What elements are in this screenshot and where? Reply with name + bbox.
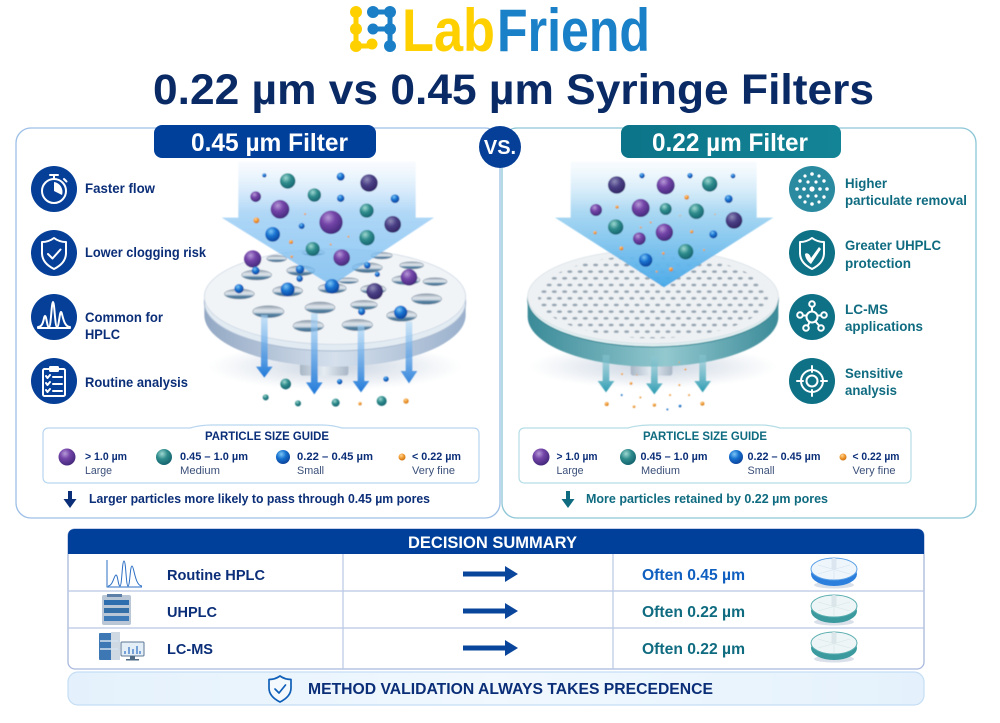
table header [68, 529, 924, 554]
size: medium: 0.45 – 1.0 µm [180, 451, 248, 463]
icon: teal syringe filter [811, 632, 857, 662]
size: large: Large [85, 465, 112, 477]
size: medium [620, 449, 708, 477]
icon: teal syringe filter [811, 595, 857, 626]
footer callout: method validation: METHOD VALIDATION ALWAYS TAKES PRECEDENCE [308, 681, 713, 698]
particle size guide: PARTICLE SIZE GUIDE [205, 431, 329, 443]
icon: UHPLC instrument [102, 594, 131, 625]
benefit: sensitive analysis [789, 358, 903, 404]
size: medium: Medium [641, 465, 680, 477]
title: 0.22 µm vs 0.45 µm Syringe Filters [153, 66, 874, 114]
heading: 0.45 µm Filter [154, 125, 376, 158]
row: UHPLC: UHPLC [167, 605, 218, 621]
illustration: small-pore filter disc with particles [528, 162, 778, 410]
benefit: greater UHPLC protection: Greater UHPLC [845, 237, 941, 253]
heading: 0.22 µm Filter: 0.22 µm Filter [652, 129, 808, 157]
VS badge: VS. [484, 137, 516, 159]
size: small [276, 450, 373, 477]
size: large: > 1.0 µm [556, 451, 598, 463]
benefit: higher particulate removal: particulate removal [845, 192, 967, 208]
icon: LC-MS instrument with monitor [99, 632, 144, 660]
panel: 0.22 µm filter [502, 125, 976, 518]
row: routine HPLC: Often 0.45 µm [642, 567, 745, 584]
size: medium [156, 449, 248, 477]
row: LC-MS: Often 0.22 µm [642, 641, 745, 658]
size: small: 0.22 – 0.45 µm [297, 451, 373, 463]
size: very fine [840, 451, 900, 477]
benefit: routine analysis [31, 358, 188, 404]
benefit: common for HPLC: HPLC [85, 326, 120, 342]
icon: shield check [269, 676, 291, 702]
flow arrows through pores [256, 313, 417, 394]
size: very fine: < 0.22 µm [852, 451, 900, 463]
particle size guide: PARTICLE SIZE GUIDE [643, 431, 767, 443]
footer callout: method validation [68, 672, 924, 705]
row: UHPLC: Often 0.22 µm [642, 604, 745, 621]
size: large: > 1.0 µm [85, 451, 127, 463]
benefit: LC-MS applications: applications [845, 318, 923, 334]
note: larger particles: Larger particles more likely to pass through 0.45 µm pores [89, 492, 430, 506]
particles [590, 173, 742, 410]
size: small: Small [748, 465, 774, 477]
benefit: lower clogging risk [31, 230, 206, 276]
panel: 0.45 µm filter [16, 125, 500, 518]
benefit: higher particulate removal: Higher [845, 175, 888, 191]
benefit: faster flow [31, 166, 155, 212]
benefit: higher particulate removal [789, 166, 967, 212]
icon: chromatogram [107, 560, 142, 587]
size: medium: 0.45 – 1.0 µm [640, 451, 708, 463]
benefit: common for HPLC: Common for [85, 309, 164, 325]
note: more particles retained: More particles retained by 0.22 µm pores [586, 492, 828, 506]
row: routine HPLC [107, 558, 857, 588]
flow arrow into filter [222, 162, 434, 286]
benefit: faster flow: Faster flow [85, 180, 155, 196]
benefit: greater UHPLC protection: protection [845, 255, 911, 271]
particle size guide [43, 425, 479, 483]
size: small: Small [297, 465, 324, 477]
benefit: greater UHPLC protection [789, 230, 941, 276]
size: large [58, 448, 127, 477]
benefit: common for HPLC [31, 294, 164, 342]
row: LC-MS: LC-MS [167, 642, 213, 658]
row: routine HPLC: Routine HPLC [167, 568, 266, 584]
benefit: lower clogging risk: Lower clogging risk [85, 244, 206, 260]
size: large: Large [556, 465, 584, 477]
size: medium: Medium [180, 465, 220, 477]
benefit: LC-MS applications [789, 294, 923, 340]
benefit: LC-MS applications: LC-MS [845, 301, 888, 317]
logo: LabFriend [350, 0, 650, 64]
flow arrows through filter [598, 355, 711, 394]
size: very fine: Very fine [852, 465, 896, 477]
small pores [538, 255, 768, 338]
benefit: sensitive analysis: analysis [845, 382, 897, 398]
illustration: large-pore filter disc with particles [204, 162, 466, 407]
size: large [532, 448, 598, 477]
size: very fine: < 0.22 µm [412, 451, 461, 463]
logo mark [350, 6, 396, 52]
icon: blue syringe filter [811, 558, 857, 588]
size: small [729, 450, 821, 477]
heading: 0.45 µm Filter: 0.45 µm Filter [191, 129, 348, 157]
row: LC-MS [99, 632, 857, 662]
row: UHPLC [102, 594, 857, 626]
VS badge [479, 126, 521, 168]
table header: DECISION SUMMARY [408, 533, 578, 552]
particles [234, 173, 417, 407]
large pores [224, 250, 447, 332]
size: very fine: Very fine [412, 465, 455, 477]
size: very fine [398, 451, 461, 477]
flow arrow into filter [555, 162, 773, 287]
particle size guide [519, 425, 911, 483]
heading: 0.22 µm Filter [621, 125, 841, 158]
benefit: routine analysis: Routine analysis [85, 374, 188, 390]
benefit: sensitive analysis: Sensitive [845, 365, 903, 381]
size: small: 0.22 – 0.45 µm [748, 451, 821, 463]
decision summary table [68, 529, 924, 669]
